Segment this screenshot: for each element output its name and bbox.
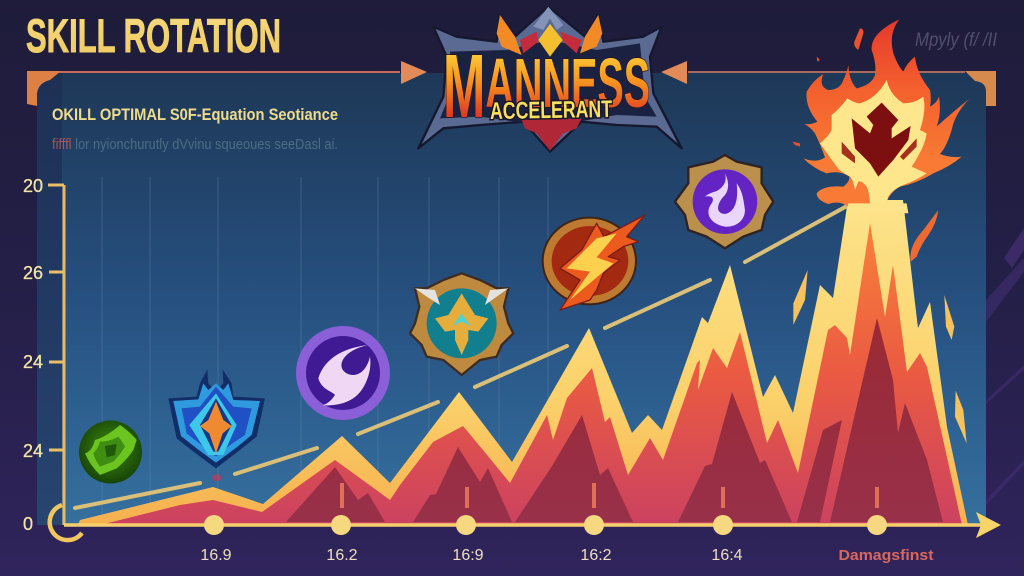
x-axis labels: 16:2 [580,547,612,564]
timeline markers [204,515,887,535]
x-axis labels: 16:9 [452,547,484,564]
y-axis labels: 24 [23,352,43,372]
axes [48,185,1001,540]
icon: lightning badge [543,215,645,310]
x-axis labels: 16.9 [200,547,232,564]
y-axis labels [23,176,43,534]
y-axis labels: 20 [23,176,43,196]
icon: teal badge [410,273,513,375]
chart layer: red middle [100,223,962,525]
logo subtitle: ACCELERANT [490,96,612,125]
x-axis labels: 16:4 [711,547,743,564]
x-axis labels: Damagsfinst [838,547,934,564]
title: SKILL ROTATION [26,9,281,62]
subtitle: OKILL OPTIMAL S0F-Equation Seotiance [52,105,338,124]
chart layer: inner ticks [342,483,877,508]
icon: flame crown [792,19,969,262]
y-axis labels: 26 [23,263,43,283]
icon: blue shield [168,369,265,481]
logo wordmark: ANNESS [485,45,650,123]
logo frame [418,7,682,152]
shards around final peak [793,270,967,443]
logo: Manness Accelerant [418,7,682,152]
dashed trend line [75,206,847,508]
panel: chart background [37,73,986,525]
x-axis labels [200,547,934,564]
chart layer: yellow outer [78,200,968,525]
icon: purple crescent orb [296,326,390,420]
logo wordmark: M [443,37,485,137]
area chart: damage peaks [78,200,968,525]
y-axis labels: 0 [23,514,33,534]
chart layer: dark red inner [286,318,943,522]
top frame with corner brackets and arrows [27,61,996,106]
icon: green orb [79,420,142,484]
y-axis labels: 24 [23,441,43,461]
x-axis labels: 16.2 [326,547,358,564]
description text: fifffl lor nyionchurutly dVvinu squeoues seeDasl ai. [52,136,338,153]
corner note: Mpyly (f/ /II [915,30,998,51]
icon: purple flame badge [675,155,773,248]
